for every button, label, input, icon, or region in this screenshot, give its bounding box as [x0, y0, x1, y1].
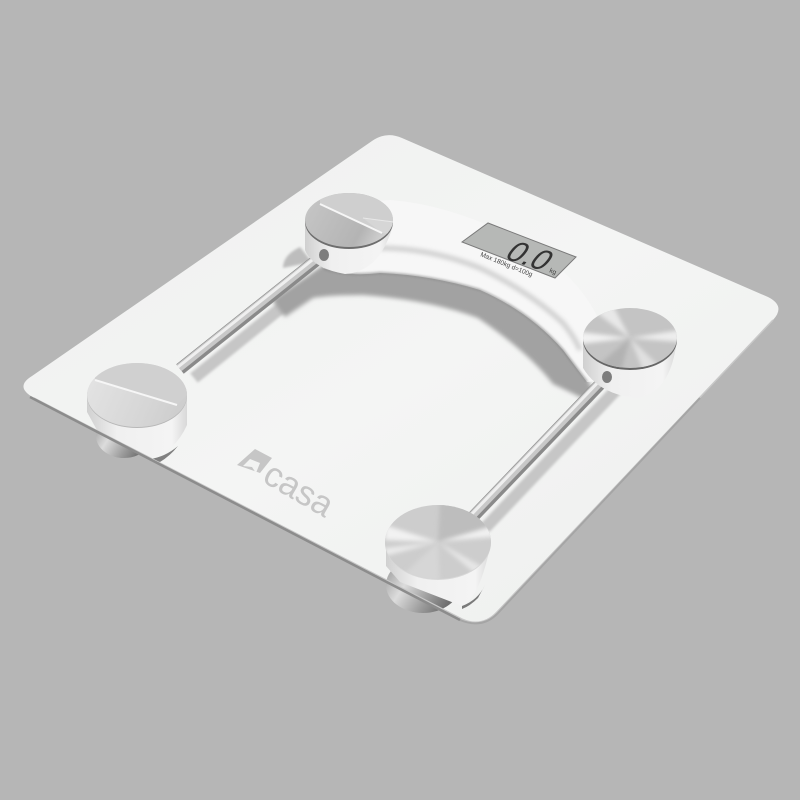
casa logo	[237, 449, 341, 525]
glass front edge	[30, 320, 773, 623]
display	[462, 223, 576, 279]
foot: bottom	[385, 500, 495, 613]
logo mark	[237, 449, 272, 473]
arch housing with display	[310, 200, 606, 382]
glass platform	[23, 135, 778, 622]
rod joint	[319, 249, 329, 261]
rod shadows	[194, 270, 616, 528]
foot: right	[583, 308, 677, 395]
arch shadow	[272, 247, 594, 402]
readout: 0.0	[498, 236, 561, 276]
right rod	[468, 375, 607, 520]
foot: left	[87, 363, 187, 462]
unit: kg	[548, 267, 558, 277]
foot: top left	[305, 193, 393, 274]
left rod	[178, 253, 323, 369]
rod joint	[602, 371, 612, 383]
infographic: glass bathroom scale product image	[24, 135, 778, 624]
capacity label: Max 180kg d=100g	[479, 251, 534, 279]
wordmark: casa	[257, 454, 341, 525]
